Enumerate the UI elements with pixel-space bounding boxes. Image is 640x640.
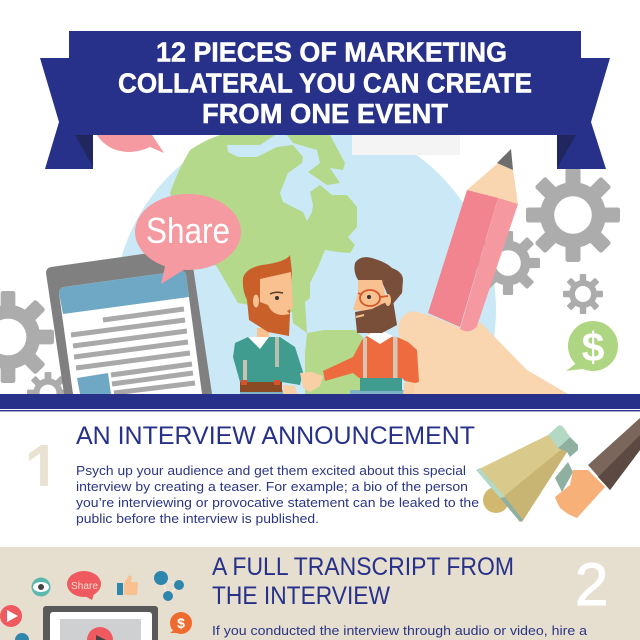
dollar bubble: $ — [582, 324, 605, 370]
left tail — [40, 58, 93, 169]
tablet text lines — [71, 309, 195, 393]
section 2 background — [0, 547, 640, 640]
heading 2 — [212, 553, 514, 610]
title — [118, 36, 532, 129]
globe — [122, 135, 496, 394]
icon: megaphone — [476, 418, 640, 522]
icon: teal circle — [15, 633, 29, 640]
speech bubble remnant — [97, 135, 164, 153]
hand — [555, 470, 605, 518]
belt — [240, 382, 282, 392]
suspenders — [363, 338, 367, 378]
hand — [403, 382, 415, 394]
number 2: 2 — [575, 551, 608, 618]
megaphone cone — [477, 435, 567, 522]
navy band — [0, 394, 640, 411]
dollar bubble — [566, 321, 618, 371]
icon: network — [154, 571, 184, 601]
body text 2: If you conducted the interview through audio or video, hire a — [212, 623, 588, 638]
collar — [248, 337, 269, 349]
body text 1: public before the interview is published. — [76, 511, 319, 526]
megaphone back dome — [483, 487, 509, 513]
collar — [367, 332, 393, 344]
man left — [233, 255, 323, 394]
monitor — [43, 606, 158, 640]
mouth — [356, 315, 364, 317]
man right — [323, 257, 419, 394]
title: COLLATERAL YOU CAN CREATE — [118, 68, 532, 98]
icon: share bubble: Share — [71, 581, 98, 592]
icon: eye — [32, 578, 50, 596]
ear — [385, 294, 391, 306]
section 2 — [0, 547, 640, 640]
hair — [354, 257, 403, 305]
heading 2: A FULL TRANSCRIPT FROM — [212, 553, 514, 581]
body text 1: Psych up your audience and get them excited about this special — [76, 463, 466, 478]
continent: arctic island — [287, 135, 345, 185]
icon: dollar: $ — [177, 615, 185, 631]
body text 1 — [76, 463, 479, 526]
tablet — [46, 248, 212, 394]
icon: dollar — [170, 612, 192, 634]
torso and arm — [323, 336, 419, 383]
eyebrow — [270, 292, 283, 294]
number 1: 1 — [23, 432, 62, 511]
neck — [368, 333, 371, 336]
face — [260, 272, 293, 315]
hand holding pencil — [398, 311, 568, 394]
icon: play button — [0, 605, 22, 627]
beard — [355, 300, 397, 333]
small gear — [563, 274, 603, 314]
glasses — [358, 290, 388, 306]
heading 2: THE INTERVIEW — [212, 582, 390, 610]
legs — [350, 390, 405, 394]
share bubble: Share — [146, 210, 230, 251]
heading 1: AN INTERVIEW ANNOUNCEMENT — [76, 422, 475, 450]
eye — [275, 296, 279, 300]
left man hand — [283, 385, 297, 394]
continent: north america — [170, 135, 366, 394]
ear — [253, 294, 259, 308]
right tail — [557, 58, 610, 169]
handshake — [300, 372, 323, 392]
torso — [233, 337, 303, 385]
megaphone handle — [555, 462, 573, 492]
neck — [257, 328, 269, 337]
big gear — [526, 168, 620, 262]
ribbon body — [69, 31, 581, 135]
share bubble — [135, 194, 241, 284]
mouth rim — [476, 468, 505, 498]
legs — [240, 390, 283, 394]
red belt clips — [241, 380, 280, 385]
icon: thumbs up — [117, 575, 138, 595]
section 1 — [23, 418, 640, 526]
icon: share bubble — [67, 571, 101, 600]
hair and beard — [243, 255, 292, 336]
eye — [367, 295, 371, 299]
sleeve — [588, 418, 640, 490]
face — [353, 280, 388, 312]
hero illustration — [0, 135, 620, 394]
small lower left gear — [27, 372, 64, 394]
medium gear — [476, 231, 540, 295]
title: 12 PIECES OF MARKETING — [156, 36, 507, 68]
left gear — [0, 291, 54, 383]
ribbon banner — [40, 31, 610, 169]
pencil — [428, 149, 518, 331]
title: FROM ONE EVENT — [202, 98, 448, 129]
suspenders — [275, 337, 279, 367]
body text 1: you’re interviewing or provocative statement can be leaked to the — [76, 495, 479, 510]
trousers — [360, 378, 402, 391]
back rim — [558, 437, 578, 457]
white block behind ribbon — [352, 135, 460, 155]
body text 1: interview by creating a teaser. For example; a bio of the person — [76, 479, 468, 494]
